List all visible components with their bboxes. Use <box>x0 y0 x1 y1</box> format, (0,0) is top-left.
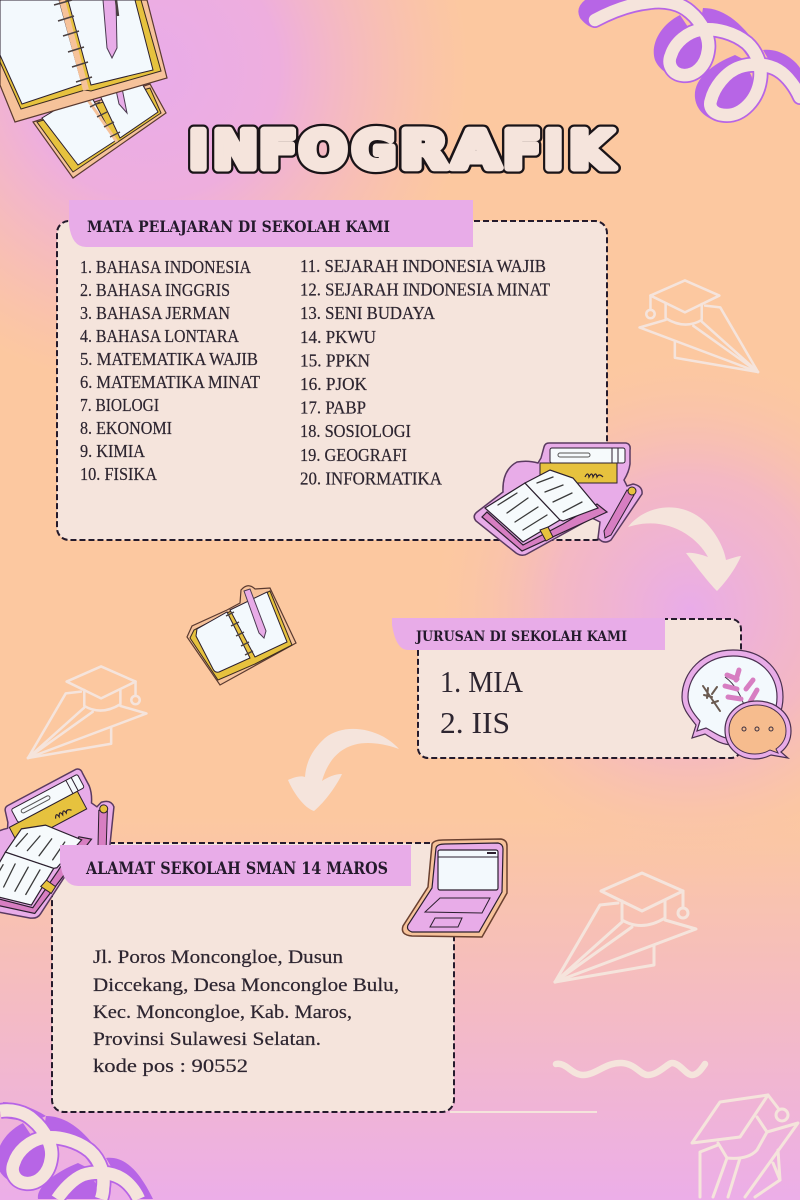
decoration: paper plane bottom corner <box>692 1095 798 1197</box>
heading: jurusan: JURUSAN DI SEKOLAH KAMI <box>414 629 627 645</box>
heading: alamat <box>60 845 411 886</box>
title: A <box>452 121 500 181</box>
title: K <box>569 121 615 181</box>
subject list column 2: 20. INFORMATIKA <box>300 468 442 488</box>
subject list column 2: 19. GEOGRAFI <box>300 445 407 465</box>
heading: mata pelajaran <box>69 200 473 247</box>
subject list column 2: 15. PPKN <box>300 350 370 370</box>
ribbon spiral top right <box>578 0 800 123</box>
icon: laptop <box>402 839 507 937</box>
title: I <box>189 121 208 181</box>
subject list column 2: 13. SENI BUDAYA <box>300 303 435 323</box>
address: Diccekang, Desa Moncongloe Bulu, <box>93 975 399 996</box>
panel: mata pelajaran <box>57 200 607 540</box>
title: N <box>213 121 258 181</box>
subject list column 1: 6. MATEMATIKA MINAT <box>80 372 260 392</box>
subject list column 2 <box>300 256 550 488</box>
subject list column 1: 7. BIOLOGI <box>80 395 159 415</box>
icon: small notebook <box>187 586 296 685</box>
heading: mata pelajaran: MATA PELAJARAN DI SEKOLAH KAMI <box>87 217 390 236</box>
subject list column 1: 9. KIMIA <box>80 441 145 461</box>
decoration: paper plane left <box>28 666 146 758</box>
panel: alamat <box>0 762 454 1112</box>
subject list column 1: 3. BAHASA JERMAN <box>80 303 230 323</box>
decoration: thin line <box>450 1111 597 1113</box>
address: Jl. Poros Moncongloe, Dusun <box>93 947 344 968</box>
title: F <box>503 121 541 181</box>
title: I <box>544 121 563 181</box>
address: Provinsi Sulawesi Selatan. <box>93 1029 321 1050</box>
major list: 2. IIS <box>440 705 510 740</box>
subject list column 1: 5. MATEMATIKA WAJIB <box>80 349 258 369</box>
title: F <box>259 121 297 181</box>
title: R <box>400 121 448 181</box>
title: R <box>400 121 448 181</box>
arrow: curved to alamat <box>288 729 399 811</box>
subject list column 2: 14. PKWU <box>300 327 376 347</box>
title: F <box>503 121 541 181</box>
major list <box>440 664 524 740</box>
subject list column 1: 1. BAHASA INDONESIA <box>80 257 251 277</box>
subject list column 2: 16. PJOK <box>300 374 367 394</box>
subject list column 1: 4. BAHASA LONTARA <box>80 326 239 346</box>
heading: alamat: ALAMAT SEKOLAH SMAN 14 MAROS <box>85 859 388 879</box>
title <box>189 121 615 181</box>
icon: notebooks top left <box>0 0 167 178</box>
subject list column 1: 8. EKONOMI <box>80 418 172 438</box>
major list: 1. MIA <box>440 664 524 699</box>
title: N <box>213 121 258 181</box>
subject list column 1: 2. BAHASA INGGRIS <box>80 280 230 300</box>
address: Kec. Moncongloe, Kab. Maros, <box>93 1002 352 1023</box>
arrow: curved to jurusan <box>628 507 741 591</box>
ribbon spiral bottom left <box>0 1102 153 1199</box>
subject list column 2: 11. SEJARAH INDONESIA WAJIB <box>300 256 546 276</box>
title: I <box>544 121 563 181</box>
subject list column 1: 10. FISIKA <box>80 464 157 484</box>
decoration: paper plane lower right <box>555 873 696 982</box>
upper notebook <box>0 0 167 122</box>
panel: jurusan <box>392 618 741 758</box>
title: G <box>352 121 396 181</box>
decoration: paper plane top right <box>640 280 758 372</box>
address <box>93 947 399 1077</box>
title: G <box>352 121 396 181</box>
subject list column 2: 17. PABP <box>300 398 366 418</box>
heading: jurusan <box>392 618 665 650</box>
subject list column 2: 12. SEJARAH INDONESIA MINAT <box>300 280 550 300</box>
subject list column 2: 18. SOSIOLOGI <box>300 421 411 441</box>
title: O <box>299 121 347 181</box>
lower notebook <box>33 80 166 178</box>
subject list column 1 <box>80 257 260 484</box>
title: I <box>189 121 208 181</box>
icon: book sticker lower left <box>0 762 143 940</box>
title: A <box>452 121 500 181</box>
icon: open book sticker <box>474 443 642 555</box>
title: F <box>259 121 297 181</box>
title: K <box>569 121 615 181</box>
icon: chat bubbles <box>682 650 791 759</box>
address: kode pos : 90552 <box>93 1056 248 1077</box>
title: O <box>299 121 347 181</box>
decoration: wavy line <box>556 1063 705 1075</box>
